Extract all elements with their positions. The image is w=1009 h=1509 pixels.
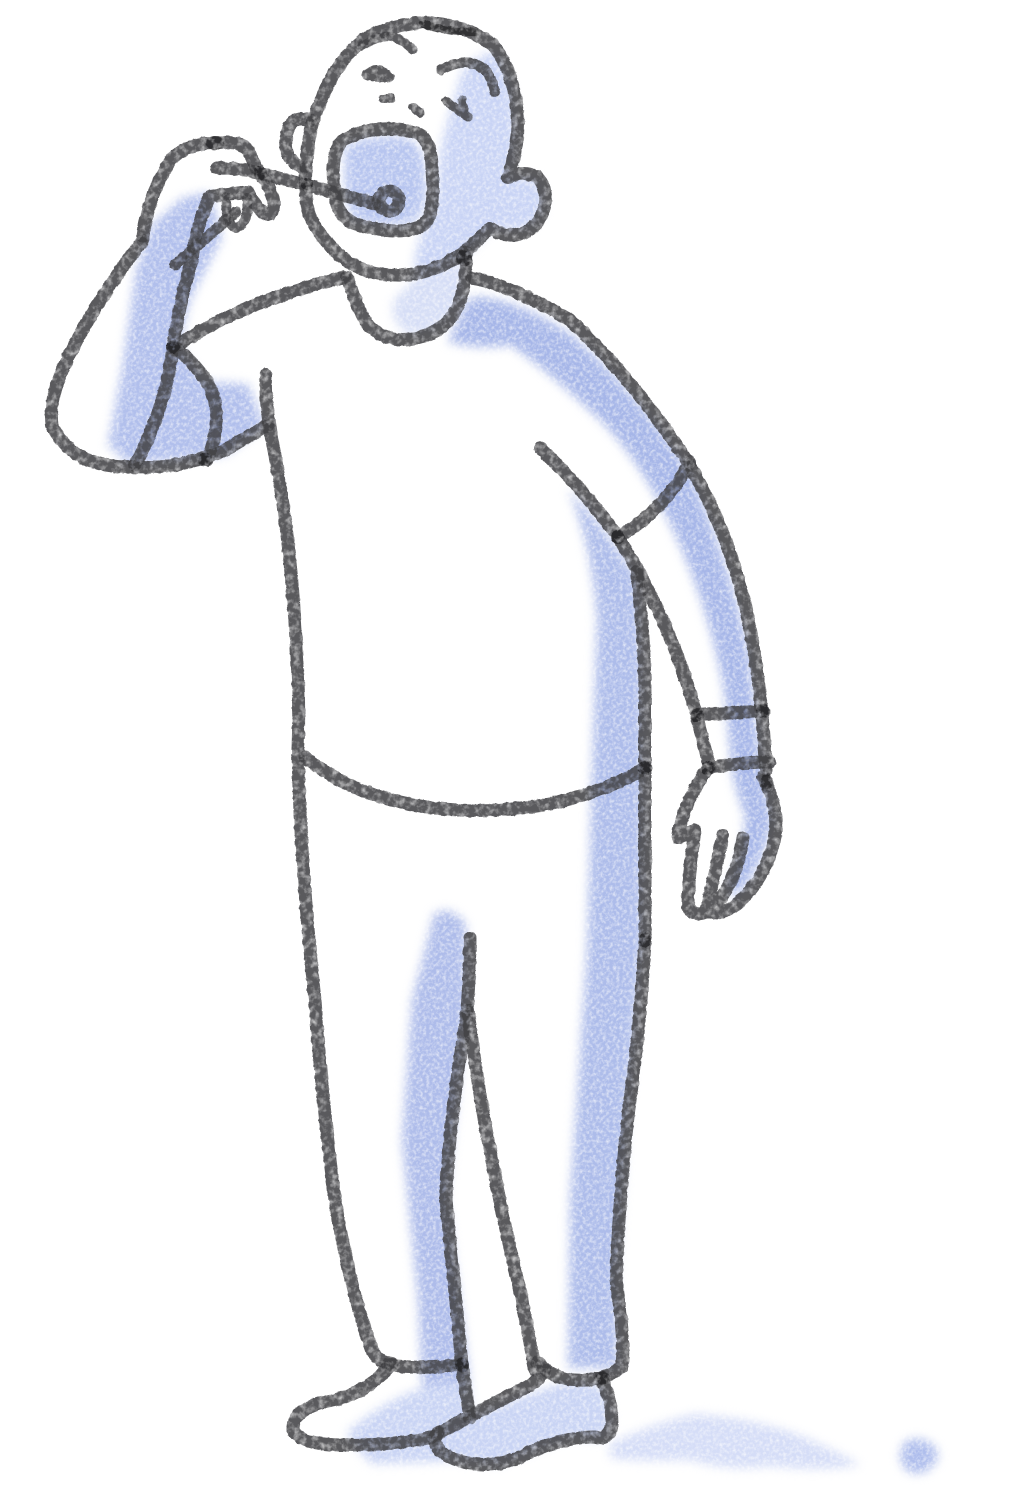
watercolor shading — [108, 52, 938, 1474]
inner right leg — [468, 1010, 535, 1370]
right sleeve hem — [618, 462, 690, 537]
ink line drawing — [51, 22, 776, 1464]
hair stroke — [423, 24, 475, 32]
shade: inner left leg — [402, 911, 470, 1416]
inner arm — [540, 448, 710, 768]
shade: right shoulder and arm — [448, 296, 772, 898]
neck — [347, 252, 466, 339]
wristband top — [697, 711, 763, 715]
wristband bottom — [708, 762, 770, 768]
right shoe — [434, 1378, 612, 1464]
shirt hem — [305, 757, 645, 811]
left shoulder — [175, 277, 345, 347]
left shoe — [293, 1368, 545, 1445]
inner left leg — [446, 938, 470, 1418]
right brow — [441, 62, 495, 92]
shade: shoes — [347, 1380, 612, 1464]
swab — [217, 168, 375, 204]
left pant cuff — [388, 1364, 461, 1367]
shade: right side of torso and leg — [568, 488, 642, 1368]
curled fingers — [226, 197, 248, 228]
raised sleeve — [175, 347, 216, 460]
raised hand — [135, 142, 274, 465]
shade: floor dot — [900, 1439, 938, 1474]
shade: raised arm — [108, 192, 264, 464]
right eye — [446, 100, 468, 117]
right shoulder and outer arm — [472, 278, 766, 770]
shade: mouth interior — [344, 136, 426, 225]
shade: face and ear — [414, 52, 544, 278]
finger line — [175, 212, 236, 265]
left side of body and leg — [266, 375, 392, 1364]
head outline — [306, 22, 545, 275]
ink overlap spots — [166, 136, 773, 1385]
lowered hand — [678, 768, 776, 914]
shade: neck — [393, 262, 462, 334]
raised forearm — [51, 240, 268, 467]
swab tip — [379, 191, 399, 211]
left brow — [362, 36, 413, 50]
left eye — [366, 70, 390, 78]
left ear — [286, 119, 310, 168]
shade: floor shadow — [610, 1414, 860, 1469]
mouth — [333, 129, 433, 231]
right side of body and leg — [537, 572, 645, 1380]
nose — [384, 98, 420, 113]
